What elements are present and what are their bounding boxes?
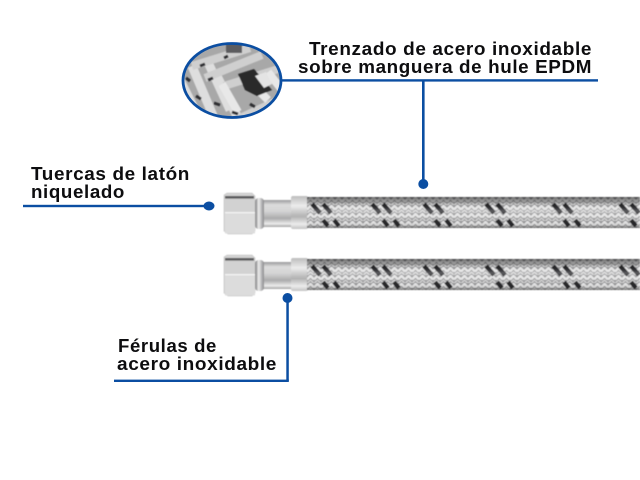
hose: lower: [224, 255, 640, 296]
hose: upper: [224, 193, 640, 234]
leader line: nuts: [23, 202, 214, 210]
heading: braid label: sobre manguera de hule EPDM: [298, 56, 592, 77]
heading: braid label: Trenzado de acero inoxidable: [309, 38, 592, 59]
text: ferrules label: [117, 335, 277, 374]
text: ferrules label: acero inoxidable: [117, 353, 277, 374]
callout: nuts: [23, 163, 214, 210]
text: nuts label: [31, 163, 190, 202]
text: nuts label: Tuercas de latón: [31, 163, 190, 184]
text: ferrules label: Férulas de: [118, 335, 217, 356]
leader line: ferrules: [114, 293, 292, 382]
leader line: braid: [281, 79, 598, 189]
heading: braid label: [298, 38, 592, 77]
callout: ferrules: [114, 293, 292, 382]
text: nuts label: niquelado: [31, 181, 125, 202]
icon: magnified braid lens: [182, 42, 282, 119]
callout: braid detail: [178, 38, 598, 189]
infographic canvas: [23, 42, 640, 382]
